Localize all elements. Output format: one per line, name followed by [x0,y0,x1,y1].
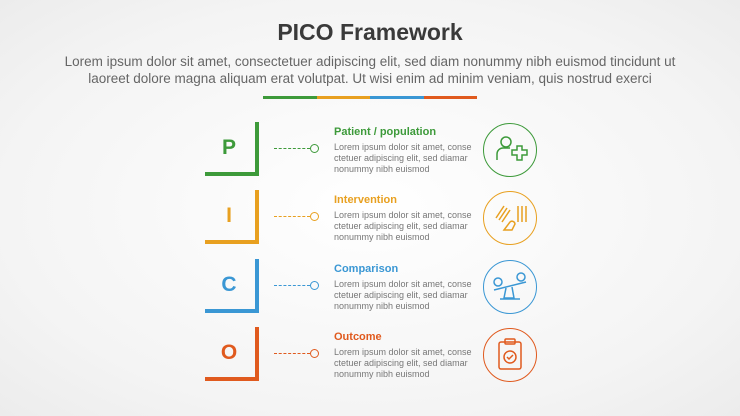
row: C: C [221,273,237,296]
icon: clipboard check [483,328,537,382]
row: O: Lorem ipsum dolor sit amet, conse ctetuer adipiscing elit, sed diamar nonummy nibh euismod [334,347,472,379]
row: O [205,327,537,382]
icon: seesaw [483,260,537,314]
row: C: Comparison [334,263,398,275]
row: P: P [222,136,236,159]
row: P: Patient / population [334,126,436,138]
row: P: Lorem ipsum dolor sit amet, conse ctetuer adipiscing elit, sed diamar nonummy nibh euismod [334,142,472,174]
title: PICO Framework [277,19,463,45]
row: O: O [221,341,237,364]
row: C: Lorem ipsum dolor sit amet, conse ctetuer adipiscing elit, sed diamar nonummy nibh euismod [334,279,472,311]
subtitle: Lorem ipsum dolor sit amet, consectetuer adipiscing elit, sed diam nonummy nibh euismod tincidunt ut laoreet dolore magna aliquam erat volutpat. Ut wisi enim ad minim veniam, quis nostrud exerci [65,54,675,86]
row: C [205,259,537,314]
row: I: Lorem ipsum dolor sit amet, conse ctetuer adipiscing elit, sed diamar nonummy nibh euismod [334,210,472,242]
icon: hand with pills [483,191,537,245]
row: O: Outcome [334,331,382,343]
icon: patient plus [483,123,537,177]
row: I: I [226,204,232,227]
color bar [263,96,477,99]
row: P [205,122,537,177]
row: I: Intervention [334,194,397,206]
row: I [205,190,537,245]
